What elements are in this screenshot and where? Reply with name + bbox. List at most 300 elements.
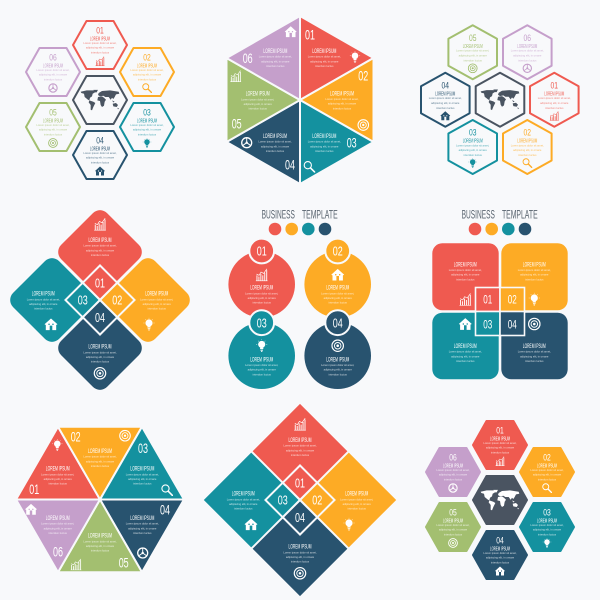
segment 02: Lorem ipsum dolor sit amet, xyxy=(83,455,117,459)
badge 02: 02 xyxy=(312,493,322,508)
petal 02: LOREM IPSUM xyxy=(145,291,168,298)
diamond 02: interdum luctus xyxy=(348,507,366,511)
square 02: Lorem ipsum dolor sit amet, xyxy=(518,268,551,272)
hexagon item 01 xyxy=(530,73,579,127)
badge 01: 01 xyxy=(295,475,305,490)
badge 02 xyxy=(300,483,335,517)
segment 06: LOREM IPSUM xyxy=(263,48,287,55)
hexagon: world map centre xyxy=(473,476,527,524)
hexagon item 02 xyxy=(120,48,174,96)
badge 04 xyxy=(83,300,117,335)
circle 03: adipiscing elit, in ornare xyxy=(248,368,276,372)
number grid xyxy=(476,288,524,336)
segment 04: 04 xyxy=(285,158,295,173)
segment 02: LOREM IPSUM xyxy=(88,448,112,455)
hexagon: world map centre xyxy=(73,76,127,124)
hexagon item 05: LOREM IPSUM xyxy=(43,118,63,124)
segment 06: LOREM IPSUM xyxy=(46,515,70,522)
segment 02: interdum luctus xyxy=(91,464,110,468)
square 04: adipiscing elit, in ornare xyxy=(520,354,549,358)
diamond 01: LOREM IPSUM xyxy=(288,437,312,444)
petal 04: Lorem ipsum dolor sit amet, xyxy=(83,350,117,354)
segment 04: interdum luctus xyxy=(266,149,285,153)
legend dots xyxy=(469,223,531,235)
hexagon item 02: adipiscing elit, in ornare xyxy=(513,148,542,152)
panel: rounded diamonds, middle left xyxy=(6,206,194,394)
petal 04: LOREM IPSUM xyxy=(88,344,112,351)
circle 01: interdum luctus xyxy=(253,301,271,305)
circle 02: Lorem ipsum dolor sit amet, xyxy=(321,291,355,295)
hexagon item 03: interdum luctus xyxy=(464,153,482,157)
segment 01: interdum luctus xyxy=(315,64,334,68)
square 02: LOREM IPSUM xyxy=(523,261,546,268)
hexagon item 06: adipiscing elit, in ornare xyxy=(39,73,68,77)
hexagon item 02: LOREM IPSUM xyxy=(537,464,557,470)
segment 05: LOREM IPSUM xyxy=(246,91,270,98)
hexagon item 01: LOREM IPSUM xyxy=(544,91,564,97)
diamond 04: interdum luctus xyxy=(291,560,310,564)
segment 05: LOREM IPSUM xyxy=(88,533,112,540)
badge 01 xyxy=(249,239,274,263)
hexagon item 03: adipiscing elit, in ornare xyxy=(133,128,162,132)
segment 03: LOREM IPSUM xyxy=(312,133,336,140)
hexagon item 01: 01 xyxy=(96,25,104,36)
segment 01: adipiscing elit, in ornare xyxy=(310,59,339,63)
petal 03: LOREM IPSUM xyxy=(32,291,55,298)
diamond 03: adipiscing elit, in ornare xyxy=(229,502,258,506)
hexagon item 05: interdum luctus xyxy=(464,58,482,62)
badge 02 xyxy=(100,283,135,317)
hexagon item 02: interdum luctus xyxy=(518,153,537,157)
diamond 01: adipiscing elit, in ornare xyxy=(286,448,315,452)
hexagon item 02: LOREM IPSUM xyxy=(517,139,537,145)
hexagon item 01: interdum luctus xyxy=(491,451,510,455)
square 03 xyxy=(432,313,499,379)
circle 01: adipiscing elit, in ornare xyxy=(248,296,276,300)
panel: rounded squares, middle right xyxy=(432,209,568,379)
hexagon item 01: interdum luctus xyxy=(545,106,564,110)
segment 04 xyxy=(100,500,184,572)
segment 02: 02 xyxy=(71,429,81,444)
hexagon item 05: Lorem ipsum dolor sit amet, xyxy=(436,523,470,527)
hexagon item 02 xyxy=(503,120,552,174)
badge 03 xyxy=(265,483,300,517)
hexagon item 01: adipiscing elit, in ornare xyxy=(86,46,115,50)
hexagon item 03 xyxy=(520,503,574,551)
petal 03 xyxy=(6,254,98,346)
number grid: 01 xyxy=(483,292,492,306)
hexagon item 06 xyxy=(426,448,480,496)
circle 01: LOREM IPSUM xyxy=(250,285,273,292)
square 02 xyxy=(501,243,568,310)
hexagon item 01: Lorem ipsum dolor sit amet, xyxy=(83,41,117,45)
hexagon item 04: 04 xyxy=(96,135,104,146)
badge 01 xyxy=(83,265,117,300)
petal 01: LOREM IPSUM xyxy=(88,237,112,244)
panel: outlined hexagon ring, top left xyxy=(26,21,174,179)
hexagon item 03: Lorem ipsum dolor sit amet, xyxy=(456,143,490,147)
segment 03: Lorem ipsum dolor sit amet, xyxy=(308,140,341,144)
hexagon item 04: adipiscing elit, in ornare xyxy=(431,101,460,105)
hexagon item 02: Lorem ipsum dolor sit amet, xyxy=(530,468,564,472)
hexagon item 01: Lorem ipsum dolor sit amet, xyxy=(483,441,517,445)
segment 01 xyxy=(300,16,374,100)
segment 05 xyxy=(226,58,300,142)
circle 02: LOREM IPSUM xyxy=(326,285,349,292)
segment 01: LOREM IPSUM xyxy=(312,48,336,55)
diamond 04: Lorem ipsum dolor sit amet, xyxy=(283,550,317,554)
panel: outlined pointy hexagons, top right xyxy=(421,25,579,174)
hexagon item 05: Lorem ipsum dolor sit amet, xyxy=(456,49,490,53)
hexagon item 06: interdum luctus xyxy=(518,58,537,62)
hexagon item 01: 01 xyxy=(496,425,504,436)
panel: circles, middle centre xyxy=(228,209,371,389)
hexagon item 06: adipiscing elit, in ornare xyxy=(439,473,468,477)
diamond 02: LOREM IPSUM xyxy=(345,491,368,498)
hexagon item 02: Lorem ipsum dolor sit amet, xyxy=(130,68,164,72)
circle 02: adipiscing elit, in ornare xyxy=(324,296,352,300)
badge 04: 04 xyxy=(295,510,305,525)
segment 04 xyxy=(226,100,300,184)
hexagon item 01: adipiscing elit, in ornare xyxy=(486,446,515,450)
segment 02: LOREM IPSUM xyxy=(330,90,354,97)
segment 01: LOREM IPSUM xyxy=(46,466,70,473)
segment 02 xyxy=(300,58,374,142)
segment 04: 04 xyxy=(160,503,170,518)
segment 06: interdum luctus xyxy=(266,64,285,68)
hexagon item 05: 05 xyxy=(49,107,57,118)
badge 03: 03 xyxy=(278,493,288,508)
hexagon item 02: adipiscing elit, in ornare xyxy=(133,73,162,77)
legend dots xyxy=(269,223,331,235)
diamond 04 xyxy=(253,501,347,596)
petal 02: interdum luctus xyxy=(148,307,166,311)
segment 06: Lorem ipsum dolor sit amet, xyxy=(41,522,75,526)
segment 03: interdum luctus xyxy=(133,482,152,486)
square 02: adipiscing elit, in ornare xyxy=(520,273,549,277)
hexagon item 04: interdum luctus xyxy=(436,106,455,110)
segment 01: adipiscing elit, in ornare xyxy=(44,477,72,481)
hexagon item 02: adipiscing elit, in ornare xyxy=(533,473,562,477)
heading: business template: BUSINESS xyxy=(462,209,495,221)
segment 02: interdum luctus xyxy=(333,106,352,110)
hexagon item 01: LOREM IPSUM xyxy=(90,36,110,42)
badge 04 xyxy=(283,500,317,535)
square 04: interdum luctus xyxy=(525,359,544,363)
segment 06: 06 xyxy=(243,51,253,66)
circle 04 xyxy=(304,322,371,389)
segment 01 xyxy=(16,427,100,500)
hexagon item 05: 05 xyxy=(469,33,476,44)
segment 02: adipiscing elit, in ornare xyxy=(86,459,115,463)
hexagon item 05: LOREM IPSUM xyxy=(443,518,463,524)
hexagon item 06: Lorem ipsum dolor sit amet, xyxy=(511,49,544,53)
diamond 03: LOREM IPSUM xyxy=(232,491,255,498)
segment 03 xyxy=(300,100,374,184)
segment 06: adipiscing elit, in ornare xyxy=(261,59,290,63)
segment 06: 06 xyxy=(53,544,63,559)
hexagon item 04: Lorem ipsum dolor sit amet, xyxy=(429,96,462,100)
panel: filled hexagon ring, bottom right xyxy=(426,421,574,579)
segment 04: LOREM IPSUM xyxy=(130,515,154,522)
badge 03: 03 xyxy=(78,293,88,308)
segment 04: adipiscing elit, in ornare xyxy=(128,526,157,530)
circle 03: LOREM IPSUM xyxy=(250,356,273,363)
diamond 01: Lorem ipsum dolor sit amet, xyxy=(283,444,317,448)
hexagon item 03: LOREM IPSUM xyxy=(137,118,157,124)
hexagon item 06: interdum luctus xyxy=(444,478,463,482)
petal 04 xyxy=(54,302,146,394)
hexagon item 04: 04 xyxy=(442,80,449,91)
square 01: adipiscing elit, in ornare xyxy=(451,273,480,277)
panel: hexagon pie, top centre xyxy=(226,16,374,184)
circle 04: Lorem ipsum dolor sit amet, xyxy=(321,363,355,367)
hexagon item 01 xyxy=(473,421,527,469)
hexagon item 01: Lorem ipsum dolor sit amet, xyxy=(538,96,571,100)
square 01: LOREM IPSUM xyxy=(454,261,477,268)
hexagon item 03: LOREM IPSUM xyxy=(537,518,557,524)
petal 02 xyxy=(102,254,194,346)
hexagon item 04 xyxy=(73,131,127,179)
petal 01: adipiscing elit, in ornare xyxy=(86,248,115,252)
petal 04: adipiscing elit, in ornare xyxy=(86,355,115,359)
segment 03 xyxy=(100,427,184,500)
hexagon item 06: 06 xyxy=(449,452,457,463)
segment 05 xyxy=(58,500,142,572)
hexagon item 06 xyxy=(503,25,552,79)
hexagon item 04: LOREM IPSUM xyxy=(90,146,110,152)
segment 05: adipiscing elit, in ornare xyxy=(244,102,272,106)
hexagon item 05: adipiscing elit, in ornare xyxy=(459,53,487,57)
hexagon item 04 xyxy=(473,531,527,579)
segment 05: Lorem ipsum dolor sit amet, xyxy=(241,97,275,101)
diamond 04: LOREM IPSUM xyxy=(288,544,312,551)
badge 04: 04 xyxy=(95,310,105,325)
segment 05: interdum luctus xyxy=(91,549,110,553)
badge 01: 01 xyxy=(257,244,267,259)
diamond 02: Lorem ipsum dolor sit amet, xyxy=(340,497,374,501)
diamond 03: interdum luctus xyxy=(234,507,253,511)
hexagon item 06: LOREM IPSUM xyxy=(43,64,63,70)
number grid: 03 xyxy=(483,317,492,331)
circle 03: Lorem ipsum dolor sit amet, xyxy=(245,363,279,367)
hexagon item 06: Lorem ipsum dolor sit amet, xyxy=(436,468,470,472)
diamond 01: interdum luctus xyxy=(291,453,310,457)
diamond 02 xyxy=(301,453,396,547)
segment 04: adipiscing elit, in ornare xyxy=(261,144,290,148)
circle 02: interdum luctus xyxy=(329,301,347,305)
square 03: interdum luctus xyxy=(456,359,475,363)
hexagon item 03: adipiscing elit, in ornare xyxy=(533,528,562,532)
badge 03 xyxy=(249,310,274,335)
segment 04: LOREM IPSUM xyxy=(263,133,287,140)
hexagon item 06: adipiscing elit, in ornare xyxy=(513,53,542,57)
badge 02: 02 xyxy=(333,244,343,259)
diamond 03 xyxy=(204,453,299,547)
circle 04: interdum luctus xyxy=(329,372,347,376)
hexagon item 02 xyxy=(520,448,574,496)
badge 02: 02 xyxy=(112,293,122,308)
hexagon item 02: interdum luctus xyxy=(538,478,557,482)
panel: triangle hexagon, bottom left xyxy=(16,427,184,572)
petal 01 xyxy=(54,206,146,298)
hexagon item 03: Lorem ipsum dolor sit amet, xyxy=(130,123,164,127)
petal 02: Lorem ipsum dolor sit amet, xyxy=(140,297,174,301)
hexagon item 06 xyxy=(26,48,80,96)
segment 02: Lorem ipsum dolor sit amet, xyxy=(325,97,359,101)
hexagon item 04: adipiscing elit, in ornare xyxy=(486,556,515,560)
square 01: Lorem ipsum dolor sit amet, xyxy=(449,268,482,272)
heading: business template: TEMPLATE xyxy=(302,209,338,221)
badge 03: 03 xyxy=(257,315,267,330)
diamond 02: adipiscing elit, in ornare xyxy=(343,502,371,506)
hexagon item 04: interdum luctus xyxy=(491,561,510,565)
circle 01: Lorem ipsum dolor sit amet, xyxy=(245,291,279,295)
hexagon item 06: LOREM IPSUM xyxy=(517,44,537,50)
hexagon item 04: Lorem ipsum dolor sit amet, xyxy=(483,551,517,555)
hexagon item 04: interdum luctus xyxy=(91,161,110,165)
hexagon item 03: Lorem ipsum dolor sit amet, xyxy=(530,523,564,527)
segment 04: interdum luctus xyxy=(133,531,152,535)
segment 05: Lorem ipsum dolor sit amet, xyxy=(83,539,117,543)
square 03: LOREM IPSUM xyxy=(454,343,477,350)
segment 04: Lorem ipsum dolor sit amet, xyxy=(258,140,292,144)
hexagon item 02: 02 xyxy=(524,128,531,139)
segment 03: Lorem ipsum dolor sit amet, xyxy=(126,472,159,476)
segment 06: adipiscing elit, in ornare xyxy=(44,526,72,530)
hexagon item 06: 06 xyxy=(524,33,531,44)
square 03: Lorem ipsum dolor sit amet, xyxy=(449,350,482,354)
square 01 xyxy=(432,243,499,310)
segment 03: LOREM IPSUM xyxy=(130,466,154,473)
hexagon item 06: interdum luctus xyxy=(44,78,63,82)
badge 04: 04 xyxy=(333,315,343,330)
square 03: adipiscing elit, in ornare xyxy=(451,354,480,358)
petal 01: Lorem ipsum dolor sit amet, xyxy=(83,244,117,248)
segment 03: 03 xyxy=(138,441,148,456)
segment 06: interdum luctus xyxy=(49,531,67,535)
segment 06 xyxy=(226,16,300,100)
hexagon: world map centre xyxy=(476,73,524,127)
hexagon item 01: LOREM IPSUM xyxy=(490,436,510,442)
hexagon item 04: 04 xyxy=(496,535,504,546)
circle 04: adipiscing elit, in ornare xyxy=(324,368,352,372)
hexagon item 03: interdum luctus xyxy=(138,133,157,137)
hexagon item 02: 02 xyxy=(543,452,551,463)
hexagon item 02: 02 xyxy=(143,52,151,63)
number grid: 02 xyxy=(508,292,517,306)
segment 01: Lorem ipsum dolor sit amet, xyxy=(41,472,75,476)
segment 01: 01 xyxy=(305,28,315,43)
number grid: 04 xyxy=(508,317,517,331)
segment 03: adipiscing elit, in ornare xyxy=(128,477,157,481)
petal 03: Lorem ipsum dolor sit amet, xyxy=(27,297,60,301)
diamond 03: Lorem ipsum dolor sit amet, xyxy=(227,497,260,501)
segment 05: interdum luctus xyxy=(249,107,267,111)
hexagon item 03 xyxy=(448,120,497,174)
badge 04 xyxy=(325,310,350,335)
petal 03: adipiscing elit, in ornare xyxy=(29,302,58,306)
hexagon item 03: adipiscing elit, in ornare xyxy=(459,148,487,152)
badge 01 xyxy=(283,465,317,500)
hexagon item 05 xyxy=(426,503,480,551)
hexagon item 06: LOREM IPSUM xyxy=(443,464,463,470)
hexagon item 03: LOREM IPSUM xyxy=(463,139,483,145)
hexagon item 05 xyxy=(448,25,497,79)
hexagon item 01: 01 xyxy=(551,80,558,91)
segment 02 xyxy=(58,427,142,500)
heading: business template: BUSINESS xyxy=(262,209,295,221)
segment 01: 01 xyxy=(29,482,39,497)
hexagon item 04: LOREM IPSUM xyxy=(435,91,455,97)
hexagon item 03 xyxy=(120,103,174,151)
badge 01: 01 xyxy=(95,275,105,290)
badge 03 xyxy=(65,283,100,317)
hexagon item 05: Lorem ipsum dolor sit amet, xyxy=(36,123,70,127)
hexagon item 04: Lorem ipsum dolor sit amet, xyxy=(83,151,117,155)
segment 01: interdum luctus xyxy=(49,482,67,486)
circle 03 xyxy=(228,322,295,389)
circle 03: interdum luctus xyxy=(253,372,271,376)
hexagon item 02: LOREM IPSUM xyxy=(137,64,157,70)
panel: sharp diamonds, bottom centre xyxy=(204,404,396,596)
segment 06: Lorem ipsum dolor sit amet, xyxy=(259,55,292,59)
square 04: LOREM IPSUM xyxy=(523,343,546,350)
hexagon item 05: interdum luctus xyxy=(444,533,463,537)
segment 05: adipiscing elit, in ornare xyxy=(86,544,115,548)
segment 02: 02 xyxy=(358,69,368,84)
segment 03: adipiscing elit, in ornare xyxy=(310,144,339,148)
badge 02 xyxy=(325,239,350,263)
segment 06 xyxy=(16,500,100,572)
hexagon item 03: 03 xyxy=(143,107,151,118)
hexagon item 03: interdum luctus xyxy=(538,533,557,537)
segment 05: 05 xyxy=(232,117,242,132)
square 04: Lorem ipsum dolor sit amet, xyxy=(518,350,551,354)
hexagon item 05: adipiscing elit, in ornare xyxy=(439,528,468,532)
heading: business template: TEMPLATE xyxy=(502,209,538,221)
segment 02: adipiscing elit, in ornare xyxy=(328,102,357,106)
petal 03: interdum luctus xyxy=(34,307,53,311)
hexagon item 05: adipiscing elit, in ornare xyxy=(39,128,68,132)
hexagon item 01 xyxy=(73,21,127,69)
hexagon item 04: LOREM IPSUM xyxy=(490,546,510,552)
hexagon item 04: adipiscing elit, in ornare xyxy=(86,156,115,160)
hexagon item 01: interdum luctus xyxy=(91,51,110,55)
circle 01 xyxy=(228,251,295,318)
segment 03: interdum luctus xyxy=(315,149,334,153)
circle 04: LOREM IPSUM xyxy=(326,356,349,363)
hexagon item 05: interdum luctus xyxy=(44,133,63,137)
hexagon item 02: Lorem ipsum dolor sit amet, xyxy=(511,143,544,147)
segment 01: Lorem ipsum dolor sit amet, xyxy=(308,55,341,59)
hexagon item 05: 05 xyxy=(449,507,457,518)
petal 04: interdum luctus xyxy=(91,360,110,364)
hexagon item 03: 03 xyxy=(543,507,551,518)
square 01: interdum luctus xyxy=(456,277,475,281)
diamond 04: adipiscing elit, in ornare xyxy=(286,555,315,559)
hexagon item 05: LOREM IPSUM xyxy=(463,44,483,50)
hexagon item 05 xyxy=(26,103,80,151)
segment 04: Lorem ipsum dolor sit amet, xyxy=(126,522,159,526)
hexagon item 06: 06 xyxy=(49,52,57,63)
hexagon item 06: Lorem ipsum dolor sit amet, xyxy=(36,68,70,72)
square 02: interdum luctus xyxy=(525,277,544,281)
hexagon item 03: 03 xyxy=(469,128,476,139)
segment 05: 05 xyxy=(119,555,129,570)
petal 01: interdum luctus xyxy=(91,253,110,257)
hexagon item 01: adipiscing elit, in ornare xyxy=(540,101,569,105)
